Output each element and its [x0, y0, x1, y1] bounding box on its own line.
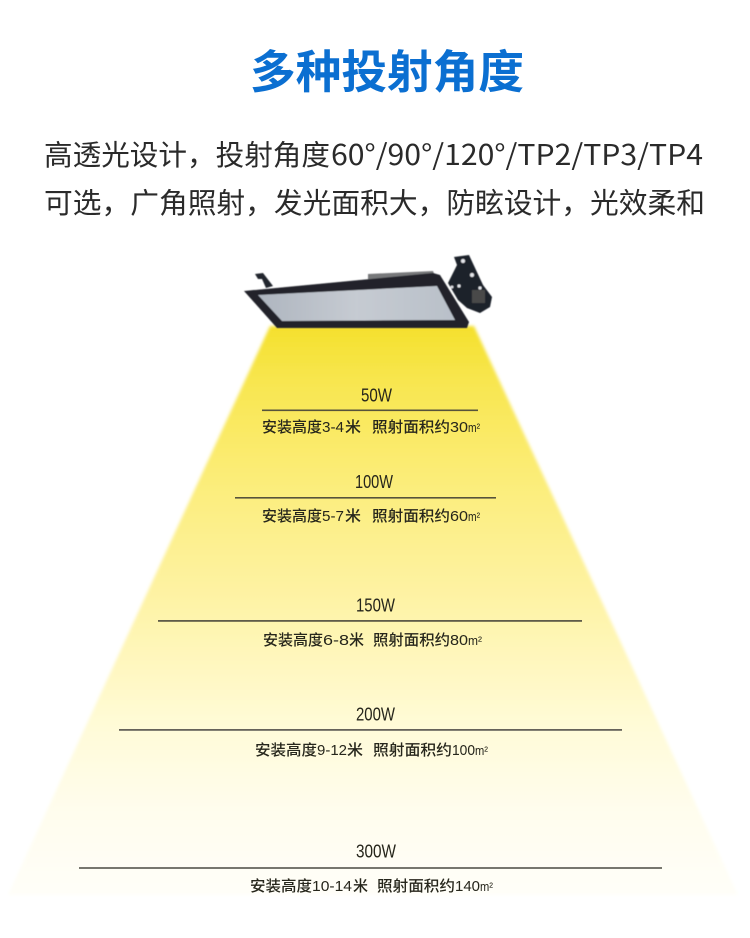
row: 100W: 60 [450, 508, 468, 525]
row: 200W: 100 [452, 742, 475, 759]
row: 50W: 50W [361, 386, 392, 406]
row: 300W: 10-14 [312, 878, 352, 895]
row: 300W: 300W [356, 842, 396, 862]
row: 150W: 150W [356, 596, 395, 616]
row: 300W [79, 842, 662, 896]
row: 200W: 照射面积约 [373, 739, 452, 760]
row: 150W: 照射面积约 [373, 629, 450, 650]
row: 200W [119, 704, 622, 760]
row: 100W: m² [468, 509, 481, 524]
row: 300W: 140 [455, 878, 480, 895]
description text: 高透光设计，投射角度 [44, 133, 330, 174]
lamp frame [244, 273, 469, 328]
row: 100W: 照射面积约 [372, 505, 450, 526]
description text: 可选，广角照射，发光面积大，防眩设计，光效柔和 [44, 181, 705, 222]
description text [44, 133, 705, 222]
row: 300W: 照射面积约 [377, 875, 455, 896]
lamp glass panel [258, 286, 455, 321]
light beam [8, 326, 738, 895]
row: 50W: 米 [345, 416, 361, 437]
row: 300W: m² [480, 879, 494, 894]
title: 多种投射角度 [250, 36, 524, 102]
row: 50W: 照射面积约 [372, 416, 450, 437]
row: 50W: m² [468, 420, 481, 435]
row: 150W: 80 [450, 632, 468, 649]
description text: 60°/90°/120°/TP2/TP3/TP4 [331, 133, 703, 174]
row: 200W: 9-12 [317, 742, 347, 759]
row: 50W: 3-4 [322, 419, 344, 436]
row: 150W: m² [468, 633, 483, 648]
row: 50W: 安装高度 [262, 416, 322, 437]
row: 300W: 安装高度 [250, 875, 312, 896]
row: 150W: 6-8 [323, 632, 349, 649]
row: 150W [158, 596, 582, 650]
row: 150W: 米 [349, 629, 364, 650]
row: 200W: 米 [347, 739, 363, 760]
row: 200W: 安装高度 [255, 739, 317, 760]
icon: floodlight fixture [244, 255, 492, 328]
row: 200W: m² [475, 743, 489, 758]
row: 100W: 100W [355, 472, 393, 492]
top housing [368, 271, 435, 280]
rear tab [255, 273, 273, 288]
row: 300W: 米 [353, 875, 368, 896]
row: 100W [235, 472, 496, 526]
row: 100W: 5-7 [322, 508, 344, 525]
mounting bracket [448, 255, 492, 313]
row: 100W: 安装高度 [262, 505, 322, 526]
row: 50W [262, 386, 481, 437]
row: 150W: 安装高度 [263, 629, 323, 650]
row: 100W: 米 [345, 505, 361, 526]
row: 50W: 30 [450, 419, 468, 436]
row: 200W: 200W [356, 704, 395, 724]
